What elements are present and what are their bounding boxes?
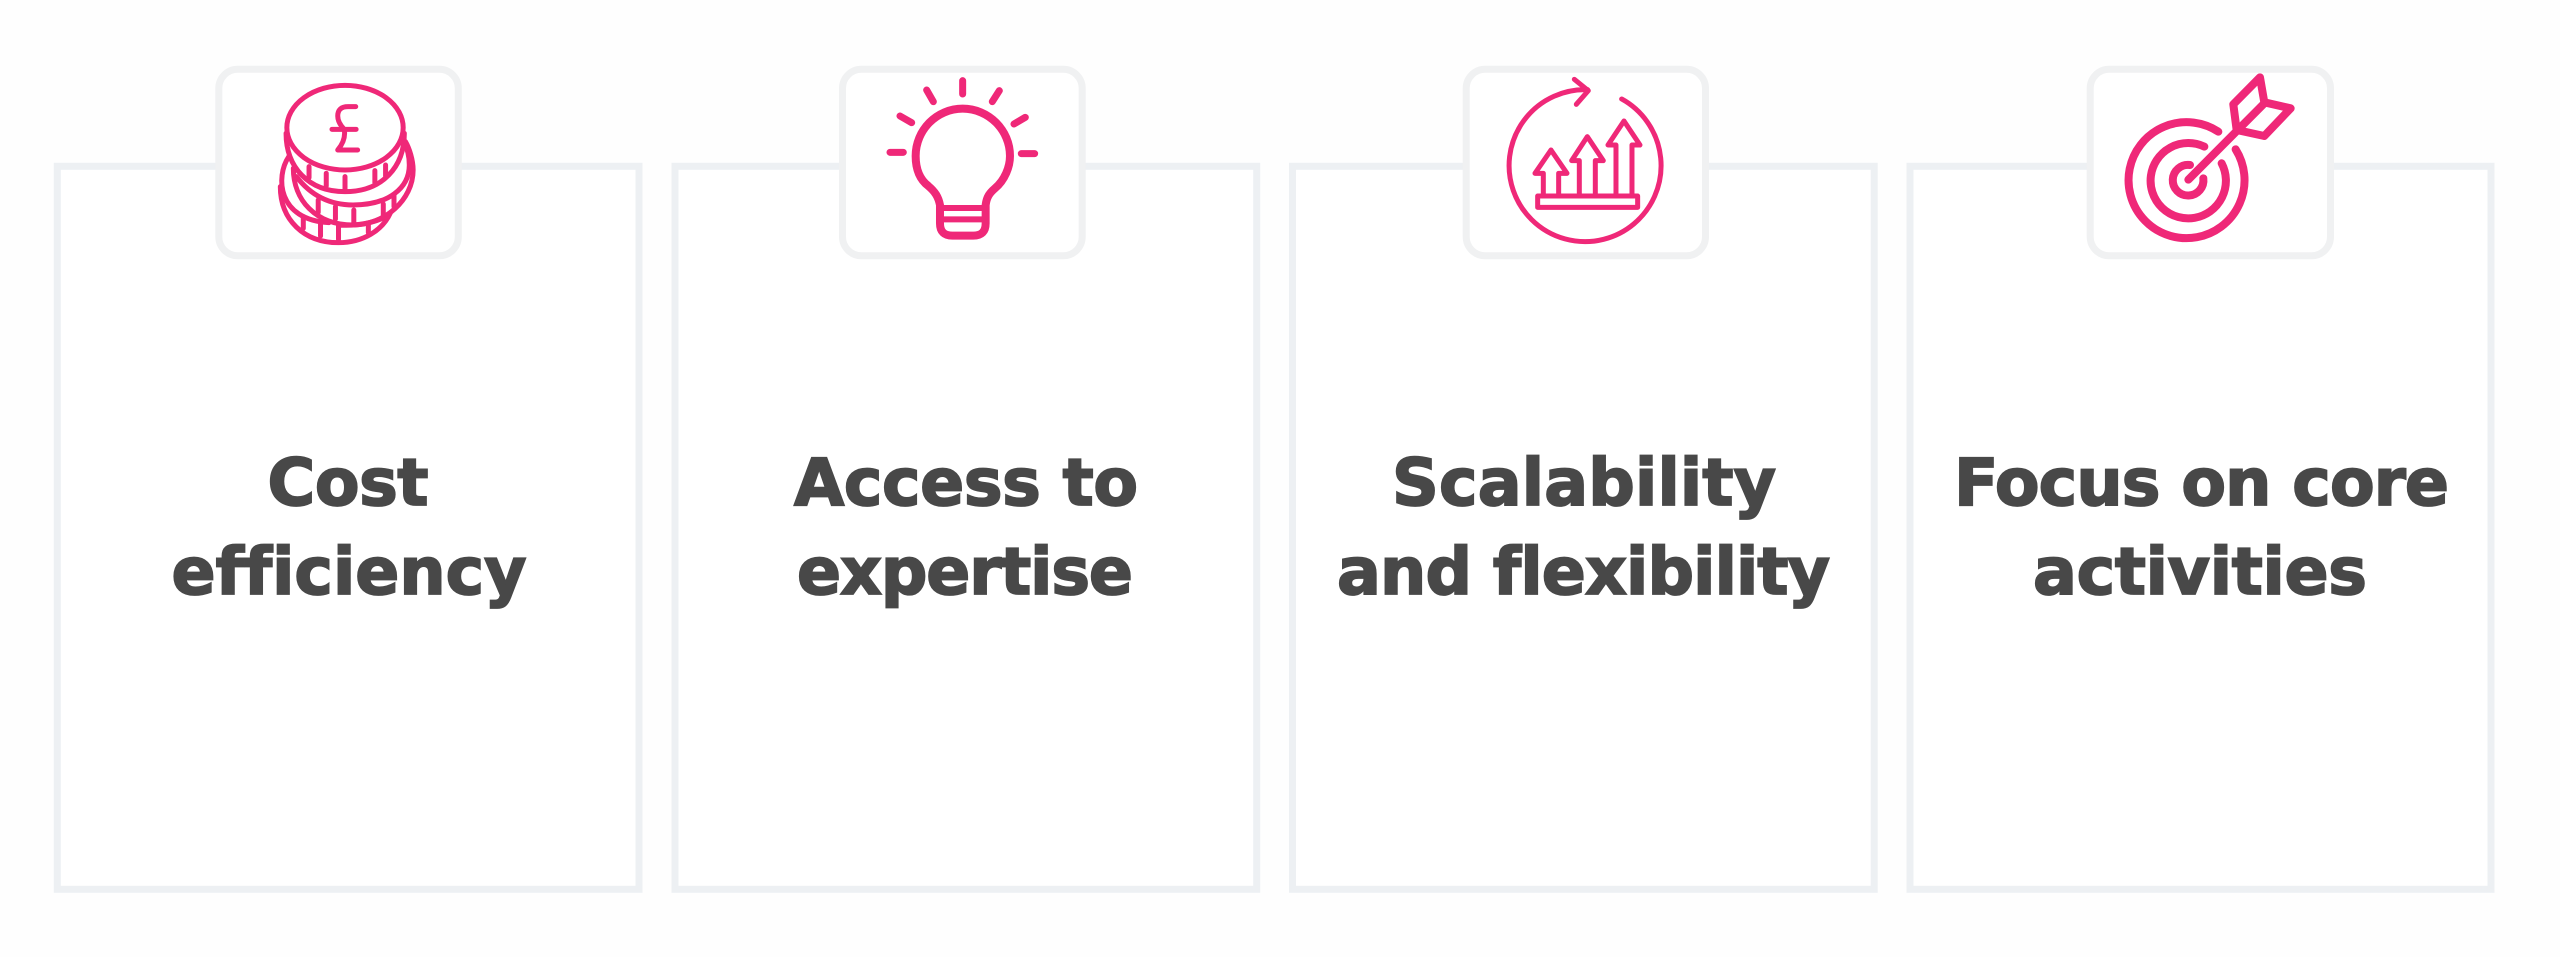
- icon: light bulb: [890, 81, 1035, 236]
- icon: target with arrow: [2129, 77, 2291, 238]
- panel: focus on core activities: [1910, 69, 2491, 889]
- card frame: [1910, 166, 2491, 889]
- heading: scalability and flexibility: [1337, 446, 1830, 610]
- panel: scalability and flexibility: [1292, 69, 1874, 889]
- heading: scalability and flexibility: Scalability: [1392, 446, 1776, 521]
- icon badge: [1466, 69, 1706, 256]
- heading: cost efficiency: [172, 446, 526, 610]
- icon: growth arrows in circular arrow: [1509, 79, 1661, 242]
- heading: focus on core activities: activities: [2033, 535, 2367, 610]
- card frame: [1292, 166, 1874, 889]
- icon badge: [219, 69, 458, 256]
- icon: pound coins: [280, 85, 413, 243]
- heading: scalability and flexibility: and flexibility: [1337, 535, 1830, 610]
- panel: cost efficiency: [57, 69, 639, 889]
- card frame: [57, 166, 639, 889]
- heading: cost efficiency: Cost: [268, 446, 428, 521]
- heading: focus on core activities: Focus on core: [1954, 446, 2449, 521]
- heading: access to expertise: expertise: [797, 535, 1133, 610]
- panel: access to expertise: [675, 69, 1257, 889]
- card frame: [675, 166, 1257, 889]
- icon badge: [2090, 69, 2330, 256]
- heading: access to expertise: Access to: [794, 446, 1138, 521]
- icon badge: [842, 69, 1082, 256]
- heading: access to expertise: [794, 446, 1138, 610]
- heading: focus on core activities: [1954, 446, 2449, 610]
- heading: cost efficiency: efficiency: [172, 535, 526, 610]
